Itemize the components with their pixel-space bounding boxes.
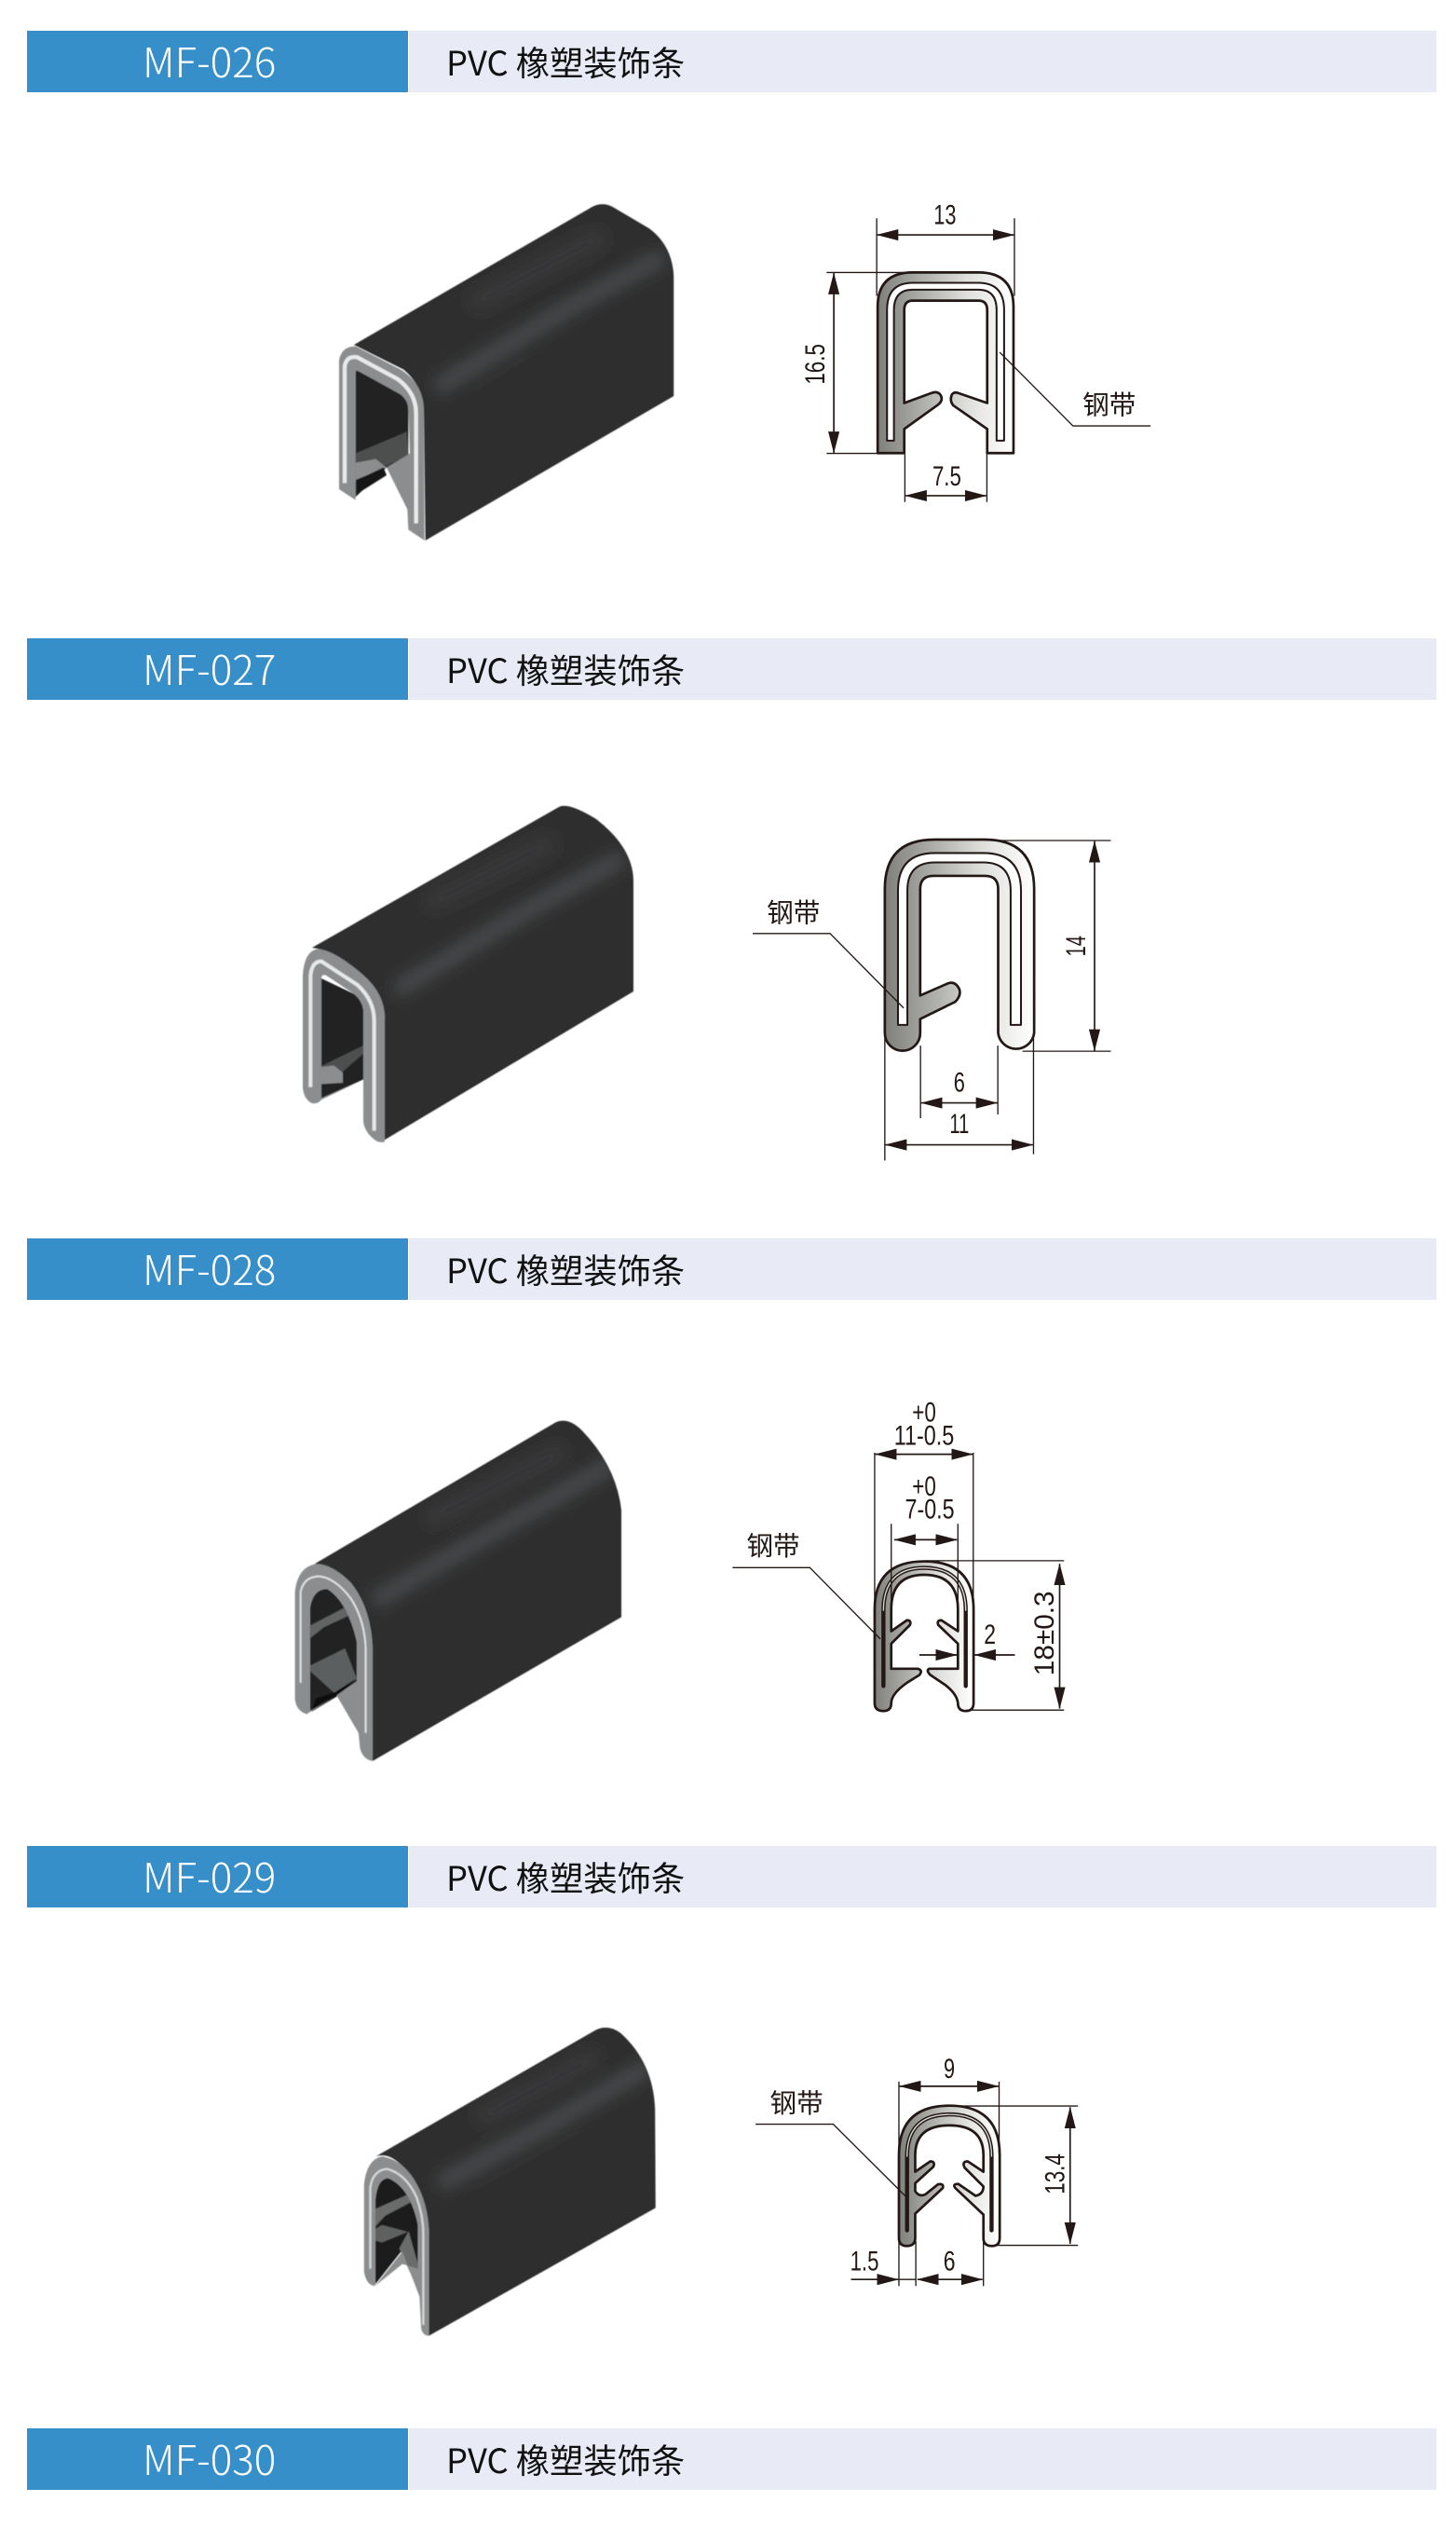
dimension 6: [918, 2241, 984, 2286]
steel band: [301, 1577, 366, 1733]
dimension 7-0.5: [891, 1471, 958, 1609]
product code MF-027: [27, 638, 408, 700]
strip interior: [310, 1589, 357, 1711]
strip body: [311, 805, 634, 1141]
callout: steel band: 钢带: [770, 2083, 823, 2121]
product code MF-028: [27, 1238, 408, 1300]
section drawing: MF-028: [732, 1397, 1064, 1711]
product name: PVC 橡塑装饰条: [446, 37, 685, 86]
strip interior: [375, 2179, 418, 2284]
dimension 6: 6: [944, 2246, 955, 2276]
dimension 1.5: 1.5: [850, 2246, 878, 2276]
dimension 13: [877, 199, 1014, 296]
dimension 2: 2: [984, 1620, 996, 1650]
strip body: [354, 203, 674, 540]
steel band: [345, 357, 416, 524]
callout: steel band: [732, 1525, 880, 1639]
strip body: [376, 2027, 657, 2336]
callout: steel band: 钢带: [767, 893, 820, 931]
product photo: MF-026 strip: [338, 203, 674, 540]
dimension 16.5: [800, 272, 909, 454]
barb: [321, 1065, 343, 1084]
product photo: MF-027 strip: [302, 805, 634, 1142]
dimension 1.5: [850, 2241, 916, 2286]
section drawing: MF-027: [753, 840, 1110, 1160]
product name: PVC 橡塑装饰条: [446, 1245, 685, 1293]
cut end ring: [364, 2156, 429, 2336]
lower slot: [357, 468, 387, 494]
product code MF-027: MF-027: [143, 637, 276, 697]
product name: PVC 橡塑装饰条: [446, 1852, 685, 1901]
strip interior: [356, 370, 408, 497]
dimension 11-0.5: +0: [912, 1397, 936, 1428]
callout: steel band: [753, 893, 904, 1008]
middle barb: [375, 2225, 408, 2243]
strip interior: [321, 978, 363, 1100]
profile outline: [875, 1562, 973, 1711]
header: MF-030: [27, 2427, 1436, 2490]
callout: steel band: 钢带: [747, 1525, 800, 1564]
steel band: [883, 1568, 966, 1686]
product photo: MF-029 strip: [363, 2027, 657, 2337]
steel band: [898, 853, 1021, 1025]
dimension 13.4: [957, 2106, 1078, 2246]
profile outline: [899, 2106, 1000, 2246]
section drawing: MF-026: [800, 199, 1150, 502]
product code MF-029: MF-029: [143, 1845, 276, 1905]
header: MF-029: [27, 1845, 1436, 1907]
steel band: [907, 2114, 991, 2230]
dimension 14: [998, 841, 1110, 1051]
product name: [409, 31, 1436, 92]
cut end ring: [295, 1564, 373, 1761]
product code MF-028: MF-028: [143, 1237, 276, 1297]
dimension 11-0.5: 11-0.5: [894, 1421, 954, 1452]
dimension 7-0.5: 7-0.5: [905, 1495, 955, 1525]
dimension 7.5: [905, 454, 987, 502]
steel band: [887, 282, 1004, 441]
product name: [409, 638, 1436, 700]
upper barb: [308, 1606, 351, 1640]
callout: steel band: 钢带: [1082, 384, 1136, 422]
dimension 9: [899, 2054, 999, 2153]
strip body: [315, 1420, 622, 1761]
header: MF-027: [27, 637, 1436, 700]
left barb: [356, 459, 387, 480]
lower slot: [311, 1678, 357, 1712]
steel band: [370, 2168, 423, 2325]
product name: [409, 1846, 1436, 1907]
cut end ring: [303, 949, 385, 1142]
dimension 9: 9: [944, 2054, 955, 2085]
steel band: [310, 962, 374, 1130]
dimension 11-0.5: [875, 1397, 973, 1611]
upper barb: [374, 2194, 412, 2226]
inner lip: [321, 1046, 363, 1073]
dimension 13.4: 13.4: [1040, 2153, 1070, 2194]
product name: PVC 橡塑装饰条: [446, 645, 685, 693]
inner lip: [356, 431, 408, 478]
callout: steel band: [755, 2083, 905, 2195]
product photo: MF-028 strip: [294, 1420, 622, 1761]
product name: [409, 2428, 1436, 2490]
dimension 18±0.3: [926, 1561, 1064, 1710]
dimension 6: 6: [954, 1067, 965, 1098]
dimension 7-0.5: +0: [912, 1471, 936, 1502]
profile outline: [878, 272, 1014, 453]
dimension 11: 11: [949, 1109, 969, 1140]
cut end ring: [339, 347, 425, 540]
dimension 6: [920, 1046, 998, 1118]
dimension 11: [885, 1033, 1033, 1160]
product code MF-026: [27, 31, 408, 92]
dimension 7.5: 7.5: [932, 461, 961, 492]
callout: steel band: [1000, 352, 1150, 426]
dimension 16.5: 16.5: [800, 344, 831, 385]
section drawing: MF-029: [755, 2054, 1078, 2286]
header: MF-026: [27, 30, 1436, 92]
dimension 13: 13: [933, 199, 956, 230]
lower barb: [310, 1648, 357, 1692]
header: MF-028: [27, 1237, 1436, 1300]
product name: PVC 橡塑装饰条: [446, 2435, 685, 2483]
dimension 2: [919, 1620, 1014, 1655]
profile outline: [885, 840, 1034, 1051]
dimension 14: 14: [1061, 936, 1092, 956]
product code MF-030: MF-030: [143, 2427, 276, 2487]
product code MF-029: [27, 1846, 408, 1907]
product code MF-030: [27, 2428, 408, 2490]
right lip: [400, 2231, 419, 2293]
product name: [409, 1238, 1436, 1300]
dimension 18±0.3: 18±0.3: [1029, 1591, 1060, 1675]
product code MF-026: MF-026: [143, 30, 276, 89]
